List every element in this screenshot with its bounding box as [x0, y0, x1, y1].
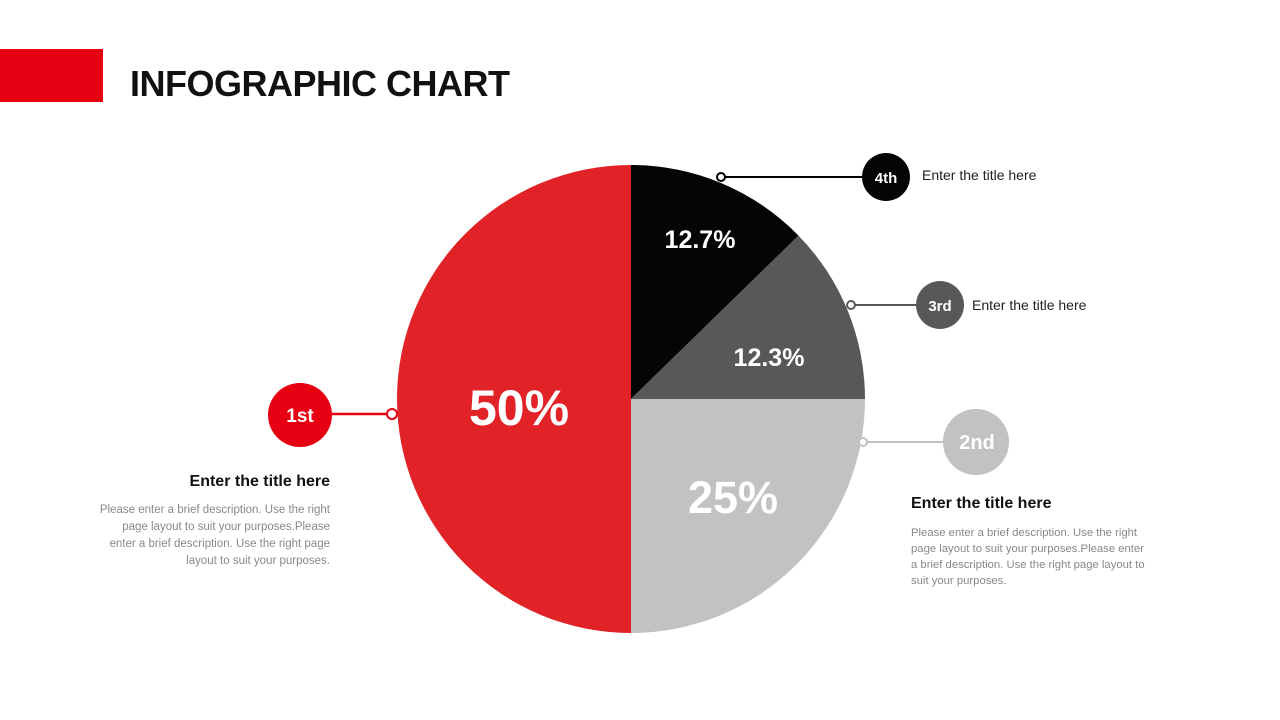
text block: 1st: Enter the title here: [190, 473, 330, 490]
text block: 1st: Please enter a brief description. Use the right page layout to suit your purposes.Please enter a brief description. Use the right page layout to suit your purposes.: [100, 504, 330, 567]
title: INFOGRAPHIC CHART: [130, 63, 509, 104]
text block: 2nd: Enter the title here: [911, 495, 1051, 512]
connector 1st: 1st: [286, 406, 314, 427]
label 3rd: Enter the title here: [972, 297, 1086, 313]
connector 1st: [268, 383, 397, 447]
connector 2nd: 2nd: [959, 432, 995, 454]
slice: 25% light gray: [631, 399, 865, 633]
slice: 12.3% dark gray: 12.3%: [734, 344, 804, 372]
slice: 12.7% black: 12.7%: [665, 226, 735, 254]
connector 4th: 4th: [875, 170, 897, 187]
slice: 25% light gray: 25%: [688, 472, 778, 523]
slice: 50% red: [397, 165, 631, 633]
connector 2nd: [859, 409, 1009, 475]
connector 3rd: [847, 281, 964, 329]
connector 4th: [717, 153, 910, 201]
slice: 50% red: 50%: [469, 380, 569, 436]
slice: 12.7% black: [631, 165, 798, 399]
connector 3rd: 3rd: [928, 298, 952, 315]
red accent bar: [0, 49, 103, 102]
text block: 2nd: Please enter a brief description. Use the right page layout to suit your purposes.Please enter a brief description. Use the right page layout to suit your purposes.: [911, 527, 1145, 587]
text block: 1st: [100, 473, 330, 567]
text block: 2nd: [911, 495, 1145, 587]
label 4th: Enter the title here: [922, 167, 1036, 183]
slice: 12.3% dark gray: [631, 236, 865, 399]
